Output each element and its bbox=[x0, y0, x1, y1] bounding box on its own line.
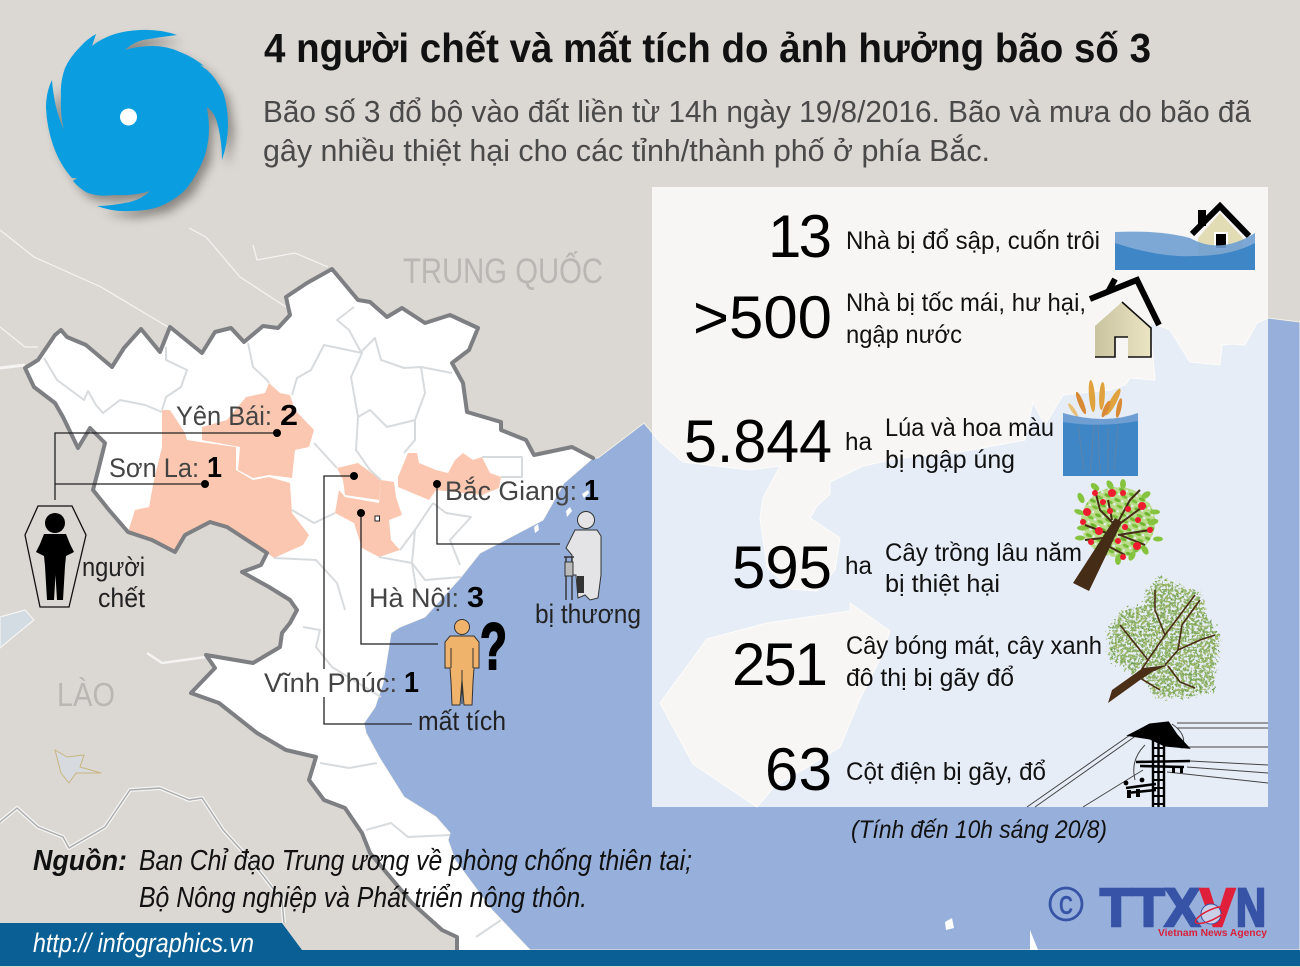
wordmark bbox=[1100, 878, 1266, 938]
unit: ha bbox=[845, 552, 872, 580]
capital marker bbox=[375, 516, 380, 521]
icon: flooded house bbox=[1115, 206, 1255, 270]
province: Vĩnh Phúc bbox=[337, 463, 381, 500]
label: Sơn La: 1 bbox=[207, 452, 222, 484]
icon: broken power pole bbox=[1027, 723, 1268, 807]
description: Nhà bị tốc mái, hư hại, bbox=[846, 289, 1086, 317]
label: mất tích: mất tích bbox=[418, 706, 506, 736]
country labels: TRUNG QUỐC bbox=[403, 251, 603, 291]
stat: power poles bbox=[765, 723, 1268, 807]
copyright symbol bbox=[1050, 888, 1082, 920]
label: Bắc Giang: 1 bbox=[584, 475, 599, 507]
wordmark: N bbox=[1236, 878, 1266, 938]
map of northern Vietnam bbox=[25, 269, 1038, 950]
intro text bbox=[263, 94, 1252, 168]
description bbox=[885, 539, 1082, 598]
label: Sơn La: Sơn La: bbox=[109, 453, 199, 483]
website url: http:// infographics.vn bbox=[33, 928, 254, 958]
description: bị thiệt hại bbox=[885, 570, 1000, 598]
logo: TTXVN bbox=[1050, 878, 1267, 939]
label: Bắc Giang: Bắc Giang: bbox=[445, 475, 577, 506]
coastal islands bbox=[534, 490, 1038, 950]
stat: shade trees bbox=[732, 578, 1220, 703]
intro text: gây nhiều thiệt hại cho các tỉnh/thành phố ở phía Bắc. bbox=[263, 133, 990, 168]
description: bị ngập úng bbox=[885, 446, 1015, 474]
stat: perennial crops bbox=[732, 479, 1163, 601]
agency name: Vietnam News Agency bbox=[1158, 927, 1267, 939]
icon: missing person bbox=[445, 620, 479, 705]
country labels: LÀO bbox=[57, 676, 115, 713]
icon: rice under water bbox=[1063, 380, 1138, 476]
cyclone eye bbox=[120, 108, 137, 126]
label: bị thương: bị thương bbox=[535, 599, 641, 629]
stat: flooded crops bbox=[684, 380, 1138, 476]
icon: fruit tree bbox=[1073, 479, 1163, 591]
number: 251 bbox=[732, 631, 828, 698]
label: người chết: người bbox=[82, 552, 145, 582]
rivers and lakes bbox=[0, 228, 328, 923]
province: Hà Nội bbox=[335, 480, 402, 557]
title: 4 người chết và mất tích do ảnh hưởng bão số 3 bbox=[264, 25, 1151, 71]
description bbox=[885, 414, 1054, 474]
description bbox=[846, 289, 1086, 349]
description: Cột điện bị gãy, đổ bbox=[846, 758, 1046, 786]
cyclone icon bbox=[46, 30, 234, 218]
province: Sơn La bbox=[128, 410, 309, 558]
footer bar bbox=[0, 923, 1300, 966]
panel: damage statistics bbox=[652, 187, 1268, 807]
label: Yên Bái: Yên Bái: bbox=[176, 401, 272, 431]
source credit: Bộ Nông nghiệp và Phát triển nông thôn. bbox=[139, 882, 587, 914]
description: Cây trồng lâu năm bbox=[885, 539, 1082, 567]
label: Vĩnh Phúc: Vĩnh Phúc: bbox=[264, 668, 397, 698]
sea bbox=[364, 318, 1300, 950]
label: Hà Nội: Hà Nội: bbox=[369, 583, 459, 613]
province boundaries bbox=[44, 307, 522, 937]
leader lines bbox=[55, 433, 560, 724]
date note: (Tính đến 10h sáng 20/8) bbox=[851, 816, 1107, 844]
copyright symbol: C bbox=[1059, 890, 1073, 920]
source credit bbox=[33, 845, 692, 914]
label: người chết: chết bbox=[98, 583, 145, 613]
description: Nhà bị đổ sập, cuốn trôi bbox=[846, 227, 1100, 255]
icon: question mark: ? bbox=[480, 609, 507, 683]
description: Lúa và hoa màu bbox=[885, 414, 1054, 442]
number: 13 bbox=[768, 203, 832, 270]
icon: fallen tree bbox=[1108, 578, 1220, 703]
source credit: Ban Chỉ đạo Trung ương về phòng chống thiên tai; bbox=[139, 845, 692, 877]
label: Vĩnh Phúc: 1 bbox=[404, 667, 419, 699]
Vietnam national border bbox=[25, 269, 593, 950]
province: Bắc Giang bbox=[398, 453, 501, 500]
number: 63 bbox=[765, 736, 832, 803]
label: Hà Nội: 3 bbox=[467, 582, 484, 614]
source credit: Nguồn: bbox=[33, 845, 127, 877]
label: Yên Bái: 2 bbox=[280, 400, 298, 432]
province: Yên Bái bbox=[202, 383, 314, 478]
description: Cây bóng mát, cây xanh bbox=[846, 632, 1102, 660]
wordmark: V bbox=[1200, 878, 1235, 938]
description: đô thị bị gãy đổ bbox=[846, 664, 1014, 692]
unit: ha bbox=[845, 428, 872, 456]
wordmark: TTX bbox=[1100, 878, 1200, 938]
globe bbox=[1193, 903, 1229, 927]
label: người chết bbox=[82, 552, 145, 613]
Vietnam land bbox=[25, 269, 593, 950]
stat: damaged houses bbox=[693, 279, 1159, 357]
country labels bbox=[57, 251, 603, 713]
intro text: Bão số 3 đổ bộ vào đất liền từ 14h ngày 19/8/2016. Bão và mưa do bão đã bbox=[263, 94, 1252, 129]
icon: coffin with person bbox=[25, 506, 86, 607]
stat: collapsed houses bbox=[768, 203, 1255, 270]
icon: injured person with crutch bbox=[564, 512, 601, 600]
location markers bbox=[201, 429, 441, 517]
icon: house with roof blown off bbox=[1090, 279, 1159, 357]
description: ngập nước bbox=[846, 321, 962, 349]
cyclone shadow bbox=[52, 37, 234, 218]
number: 5.844 bbox=[684, 408, 832, 475]
cyclone body bbox=[46, 30, 228, 211]
number: >500 bbox=[693, 284, 832, 351]
description bbox=[846, 632, 1102, 692]
number: 595 bbox=[732, 534, 832, 601]
